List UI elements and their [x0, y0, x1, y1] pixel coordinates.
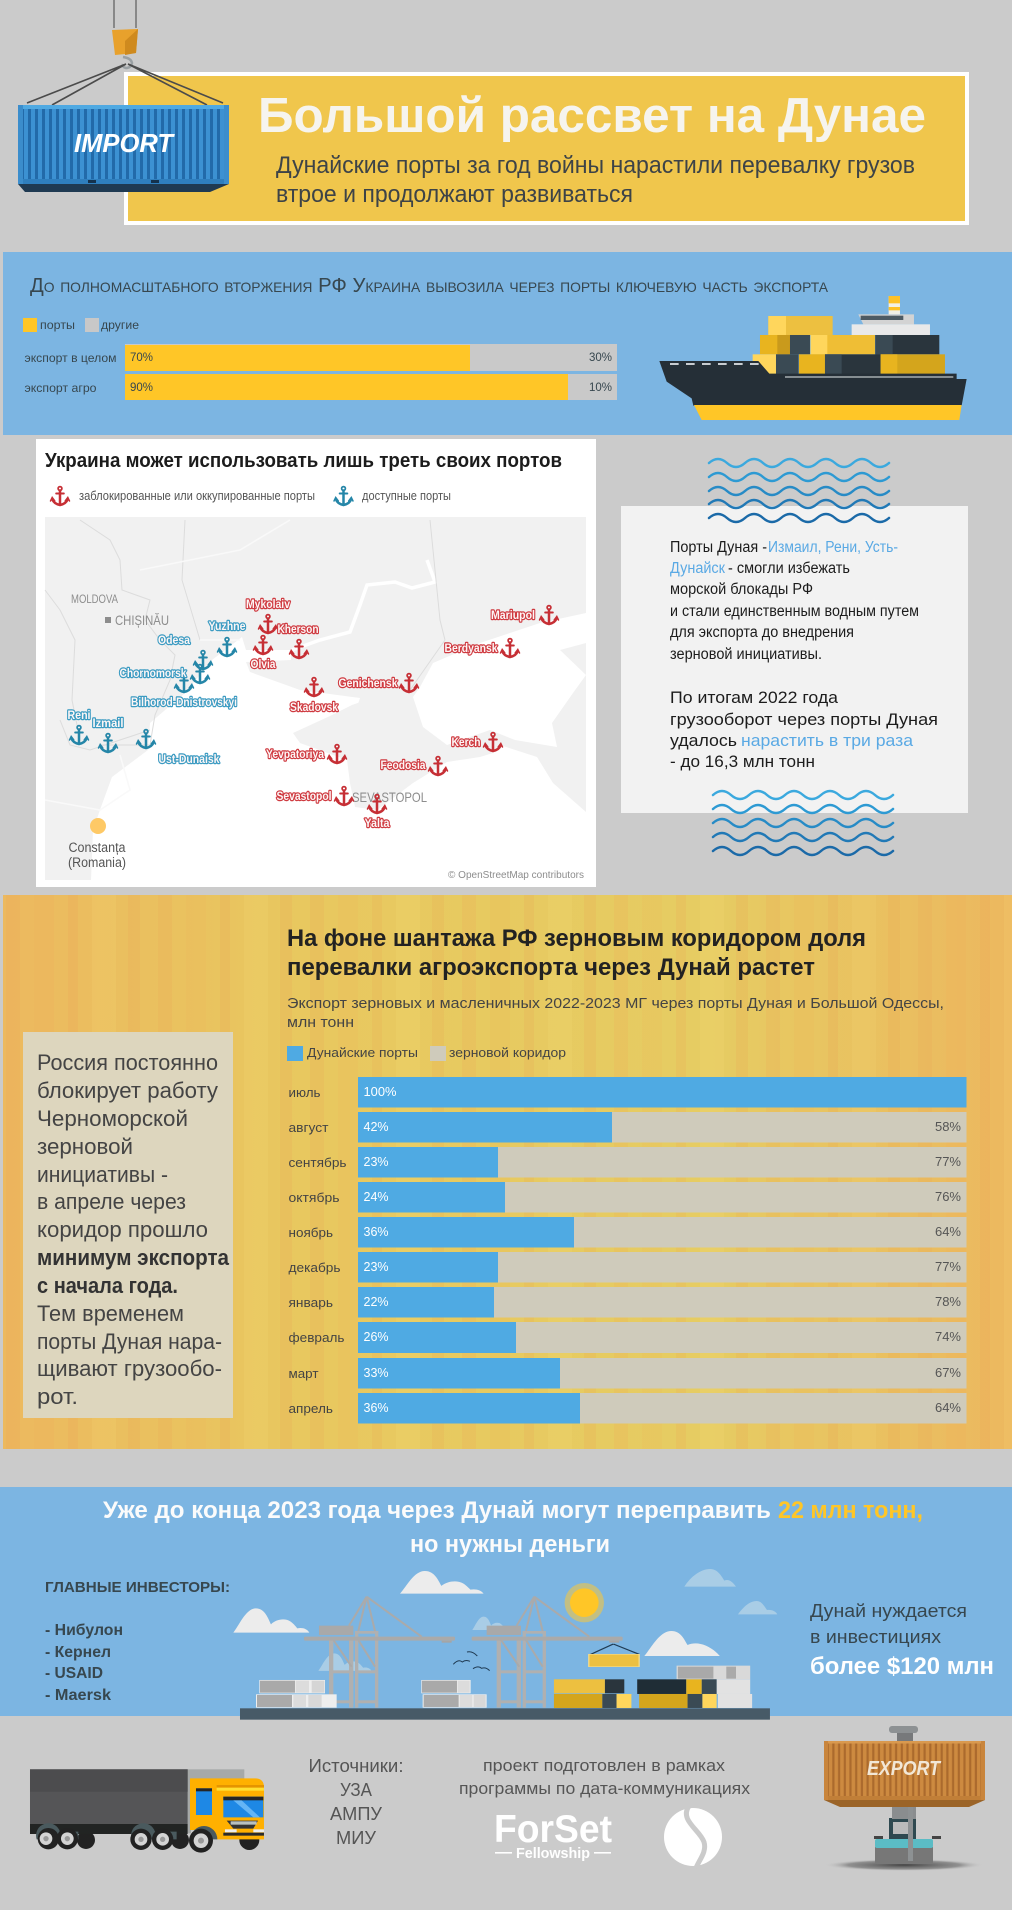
- illustration: port with cranes: [233, 1569, 777, 1720]
- investment need: более $120 млн: [810, 1653, 994, 1680]
- text block: growth: [670, 688, 938, 771]
- callout: blockade: в апреле через: [37, 1189, 186, 1214]
- map legend: доступные порты: [362, 489, 451, 503]
- project credit: проект подготовлен в рамках: [483, 1756, 726, 1775]
- stacked bar chart: июль: [288, 1085, 321, 1100]
- stacked bar chart: 76%: [935, 1189, 961, 1204]
- stacked bar chart: 26%: [364, 1329, 389, 1344]
- investors list: [45, 1579, 230, 1704]
- legend: [23, 318, 139, 332]
- text block: blockade: зерновой инициативы.: [670, 646, 822, 663]
- blocked or occupied ports: Kerch: [452, 737, 480, 749]
- callout: blockade: [23, 1032, 233, 1418]
- subtitle: [276, 152, 915, 208]
- stacked bar chart: 58%: [935, 1119, 961, 1134]
- stacked bar chart: январь: [288, 1295, 333, 1310]
- legend: другие: [101, 320, 139, 332]
- map place names: SEVASTOPOL: [352, 789, 427, 805]
- stacked bar chart: [288, 1077, 966, 1424]
- bar chart: 30%: [589, 350, 612, 364]
- stacked bar chart: ноябрь: [288, 1225, 333, 1240]
- blocked or occupied ports: Yevpatoriya: [266, 749, 325, 761]
- marker: Constanța: (Romania): [68, 855, 126, 870]
- callout: blockade: инициативы -: [37, 1162, 168, 1187]
- blocked or occupied ports: Berdyansk: [444, 643, 498, 655]
- map legend: заблокированные или оккупированные порты: [79, 489, 315, 503]
- icon: truck: [30, 1769, 264, 1853]
- investors list: - Maersk: [45, 1687, 111, 1704]
- sources: УЗА: [340, 1780, 372, 1800]
- investors list: - Кернел: [45, 1644, 111, 1661]
- project credit: программы по дата-коммуникациях: [459, 1779, 751, 1798]
- panel: Danube ports text: [621, 506, 968, 813]
- chart legend: Дунайские порты: [307, 1045, 418, 1060]
- stacked bar chart: 42%: [364, 1119, 389, 1134]
- stacked bar chart: 33%: [364, 1365, 389, 1380]
- available ports: Ust-Dunaisk: [158, 754, 220, 766]
- subtitle: Дунайские порты за год войны нарастили перевалку грузов: [276, 152, 915, 179]
- available ports: Chornomorsk: [120, 668, 187, 680]
- callout: blockade: щивают грузообо-: [37, 1356, 222, 1381]
- blocked or occupied ports: Yalta: [364, 818, 390, 830]
- text block: growth: грузооборот через порты Дуная: [670, 710, 938, 729]
- investment need: [810, 1601, 994, 1680]
- bar chart: 90%: [130, 380, 153, 394]
- text block: blockade: Порты Дуная -: [670, 539, 767, 556]
- stacked bar chart: 67%: [935, 1365, 961, 1380]
- investors list: - USAID: [45, 1665, 103, 1682]
- stacked bar chart: октябрь: [288, 1190, 340, 1205]
- available ports: Izmail: [92, 718, 124, 730]
- icon: waves bottom: [713, 791, 893, 855]
- blocked or occupied ports: Skadovsk: [290, 702, 339, 714]
- text block: blockade: морской блокады РФ: [670, 581, 813, 598]
- stacked bar chart: 74%: [935, 1329, 961, 1344]
- heading: 22 млн тонн,: [778, 1497, 923, 1524]
- bar chart: экспорт агро: [24, 381, 97, 395]
- icon: blue IMPORT container on crane hook: [18, 0, 229, 192]
- bar chart: экспорт в целом: [24, 351, 116, 365]
- stacked bar chart: август: [288, 1120, 329, 1135]
- available ports: Odesa: [158, 635, 191, 647]
- callout: blockade: порты Дуная нара-: [37, 1329, 222, 1354]
- marker: Constanța: [68, 818, 126, 870]
- text block: blockade: Дунайск: [670, 560, 725, 577]
- stacked bar chart: 23%: [364, 1154, 389, 1169]
- map place names: MOLDOVA: [71, 592, 118, 606]
- available ports: Reni: [68, 710, 90, 722]
- title: Большой рассвет на Дунае: [258, 89, 926, 143]
- stacked bar chart: февраль: [288, 1330, 345, 1345]
- text block: growth: - до 16,3 млн тонн: [670, 752, 815, 771]
- chart heading: [287, 925, 866, 981]
- stacked bar chart: сентябрь: [288, 1155, 347, 1170]
- bar chart: [24, 344, 617, 400]
- blocked or occupied ports: Kherson: [278, 624, 318, 636]
- stacked bar chart: 24%: [364, 1189, 389, 1204]
- investment need: Дунай нуждается: [810, 1601, 967, 1621]
- blocked or occupied ports: [246, 599, 558, 830]
- available ports: Bilhorod-Dnistrovskyi: [131, 697, 237, 709]
- stacked bar chart: 23%: [364, 1259, 389, 1274]
- panel: agro export chart: [3, 895, 1012, 1449]
- callout: blockade: Тем временем: [37, 1301, 184, 1326]
- panel: map of Ukrainian ports: [36, 439, 596, 887]
- text block: growth: удалось: [670, 731, 737, 750]
- heading: Уже до конца 2023 года через Дунай могут переправить: [103, 1497, 771, 1524]
- logo: circle mark: [664, 1806, 722, 1868]
- blocked or occupied ports: Mariupol: [491, 610, 535, 622]
- stacked bar chart: 36%: [364, 1224, 389, 1239]
- map place names: CHIȘINĂU: [115, 612, 169, 628]
- chart legend: зерновой коридор: [449, 1045, 566, 1060]
- stacked bar chart: 100%: [364, 1084, 397, 1099]
- map place names: [71, 592, 584, 881]
- marker: Constanța: Constanța: [68, 840, 126, 855]
- subtitle: втрое и продолжают развиваться: [276, 181, 633, 208]
- sources: АМПУ: [330, 1804, 383, 1824]
- callout: blockade: коридор прошло: [37, 1217, 208, 1242]
- blocked or occupied ports: Sevastopol: [276, 791, 332, 803]
- icon: orange EXPORT container on forklift: [824, 1726, 985, 1871]
- bar chart: 10%: [589, 380, 612, 394]
- callout: blockade: зерновой: [37, 1134, 133, 1159]
- investors list: ГЛАВНЫЕ ИНВЕСТОРЫ:: [45, 1579, 230, 1596]
- title block: [126, 74, 967, 223]
- text block: growth: нарастить в три раза: [741, 731, 914, 750]
- stacked bar chart: март: [288, 1366, 319, 1381]
- icon: container ship: [659, 296, 967, 420]
- sources: [308, 1756, 404, 1848]
- icon: orange EXPORT container on forklift: EXPORT: [867, 1758, 942, 1780]
- available ports: [68, 621, 246, 766]
- chart subtitle: [287, 995, 944, 1031]
- text block: growth: По итогам 2022 года: [670, 688, 839, 707]
- stacked bar chart: 77%: [935, 1259, 961, 1274]
- investors list: - Нибулон: [45, 1622, 123, 1639]
- chart legend: [287, 1045, 566, 1061]
- sources: МИУ: [336, 1828, 377, 1848]
- stacked bar chart: 64%: [935, 1224, 961, 1239]
- map place names: © OpenStreetMap contributors: [448, 869, 584, 881]
- text block: blockade: [670, 539, 919, 663]
- stacked bar chart: апрель: [288, 1401, 333, 1416]
- callout: blockade: минимум экспорта: [37, 1245, 230, 1270]
- logo: ForSet Fellowship: Fellowship: [516, 1846, 590, 1862]
- project credit: [459, 1756, 751, 1798]
- map heading: Украина может использовать лишь треть своих портов: [45, 450, 562, 472]
- investment need: в инвестициях: [810, 1627, 941, 1647]
- heading: До полномасштабного вторжения РФ Украина вывозила через порты ключевую часть экспорта: [30, 274, 829, 297]
- map legend: [50, 487, 451, 505]
- logo: ForSet Fellowship: ForSet: [494, 1808, 612, 1851]
- icon: waves top: [709, 459, 889, 522]
- text block: blockade: - смогли избежать: [728, 560, 850, 577]
- blocked or occupied ports: Feodosia: [380, 760, 426, 772]
- callout: blockade: Черноморской: [37, 1106, 188, 1131]
- heading: [103, 1497, 923, 1558]
- heading: но нужны деньги: [410, 1531, 610, 1558]
- chart subtitle: Экспорт зерновых и масленичных 2022-2023 МГ через порты Дуная и Большой Одессы,: [287, 995, 944, 1012]
- callout: blockade: с начала года.: [37, 1273, 178, 1298]
- sources: Источники:: [308, 1756, 404, 1776]
- panel: investment: [0, 1487, 1012, 1720]
- text block: blockade: и стали единственным водным путем: [670, 603, 919, 620]
- chart heading: На фоне шантажа РФ зерновым коридором доля: [287, 925, 866, 952]
- stacked bar chart: декабрь: [288, 1260, 341, 1275]
- callout: blockade: блокирует работу: [37, 1078, 218, 1103]
- map: [45, 517, 586, 881]
- icon: blue IMPORT container on crane hook: IMPORT: [74, 128, 175, 158]
- bar chart: 70%: [130, 350, 153, 364]
- stacked bar chart: 36%: [364, 1400, 389, 1415]
- text block: blockade: для экспорта до внедрения: [670, 624, 854, 641]
- panel: ports share of export: [3, 252, 1012, 435]
- blocked or occupied ports: Mykolaiv: [246, 599, 291, 611]
- stacked bar chart: 22%: [364, 1294, 389, 1309]
- callout: blockade: Россия постоянно: [37, 1050, 218, 1075]
- legend: порты: [40, 320, 75, 332]
- stacked bar chart: 78%: [935, 1294, 961, 1309]
- blocked or occupied ports: Genichensk: [338, 678, 398, 690]
- stacked bar chart: 64%: [935, 1400, 961, 1415]
- available ports: Yuzhne: [208, 621, 246, 633]
- chart subtitle: млн тонн: [287, 1014, 354, 1031]
- callout: blockade: рот.: [37, 1384, 78, 1409]
- blocked or occupied ports: Olvia: [250, 659, 276, 671]
- text block: blockade: Измаил, Рени, Усть-: [768, 539, 898, 556]
- chart heading: перевалки агроэкспорта через Дунай растет: [287, 954, 815, 981]
- stacked bar chart: 77%: [935, 1154, 961, 1169]
